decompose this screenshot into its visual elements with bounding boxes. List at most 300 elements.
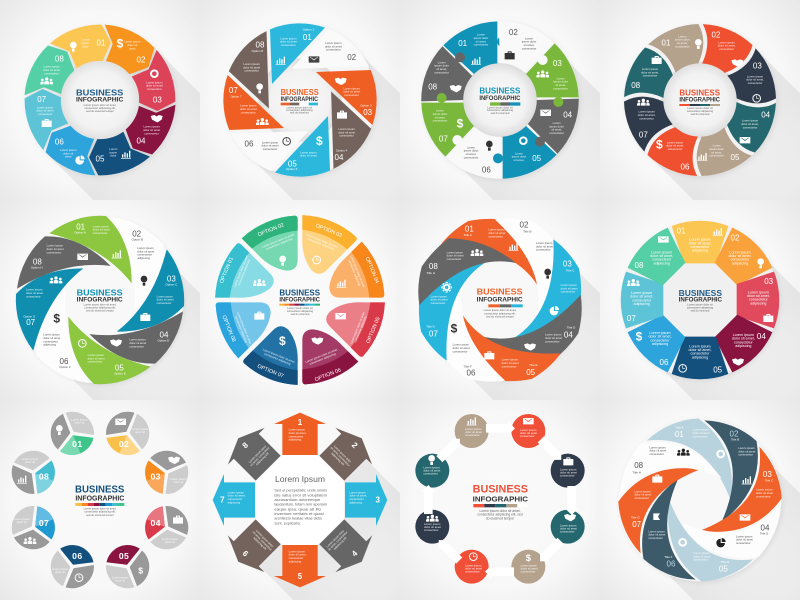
icon: clock: [752, 94, 761, 103]
icon: people: [256, 118, 269, 125]
circle 08: [0, 437, 64, 506]
icon: briefcase: [652, 56, 662, 64]
text 04: consectetur: [734, 340, 754, 344]
segment 02: Title B: [731, 437, 739, 441]
text 07: Lorem ipsum: [240, 104, 257, 108]
text 08: consectetur: [447, 257, 461, 261]
segment 02: 02: [731, 234, 740, 243]
text 01: adipiscing: [692, 249, 708, 253]
text 02: sit amet,: [524, 43, 535, 47]
node 06: [455, 550, 489, 584]
segment 01: 01: [675, 430, 684, 439]
text 07: dolor sit amet,: [638, 113, 656, 117]
text 07: consectetur: [424, 528, 439, 532]
text 07: Lorem ipsum: [634, 489, 651, 493]
petal option 02: OPTION 02: [257, 222, 285, 238]
text 02: consectetur: [719, 47, 734, 51]
icon: dollar: $: [636, 329, 643, 343]
circle 07: [0, 494, 64, 563]
text 08: consectetur: [423, 471, 438, 475]
text 06: Lorem ipsum: [43, 333, 60, 337]
text 03: Lorem ipsum: [747, 74, 763, 78]
text 07: Lorem ipsum: [37, 105, 53, 109]
icon: dollar: $: [279, 334, 286, 348]
title: BUSINESS: [279, 287, 320, 297]
text 06: Lorem ipsum: [648, 529, 665, 533]
segment 04: 04: [160, 330, 169, 339]
text 1: consectetur: [289, 434, 303, 438]
petal option 01: OPTION 01: [219, 256, 235, 284]
text 01: dolor: [82, 44, 89, 48]
circle 02: [94, 398, 163, 464]
segment 01: Title A: [675, 426, 683, 430]
segment 07: [16, 268, 83, 351]
segment 05: [89, 132, 150, 175]
segment 02: Title B: [523, 229, 532, 233]
text 04: ipsum dolor: [549, 124, 564, 128]
segment 05: Title E: [529, 363, 538, 367]
title: consectetur adipiscing: [687, 109, 714, 113]
title: INFOGRAPHIC: [679, 298, 723, 304]
segment 03: Title C: [765, 478, 774, 482]
icon: bulb: [70, 42, 77, 52]
text 07: dolor sit: [17, 520, 27, 524]
segment 07: [618, 468, 700, 553]
text 03: dolor sit amet: [756, 491, 773, 495]
title: BUSINESS: [679, 288, 722, 298]
segment 07: Title G: [631, 516, 640, 520]
text 06: dolor sit amet: [648, 533, 666, 537]
segment 06: Title F: [664, 555, 673, 559]
text 02: Lorem ipsum: [738, 446, 755, 450]
circle 06: [37, 536, 106, 600]
title: BUSINESS: [75, 485, 125, 496]
text 3: Lorem ipsum: [349, 490, 366, 494]
text 07: Lorem ipsum: [13, 517, 30, 521]
segment 02: [662, 405, 780, 523]
text 01: consectetur adipiscing: [237, 258, 251, 286]
segment 01: [443, 21, 507, 74]
text 01: consectetur: [465, 433, 480, 437]
segment 02: [683, 10, 756, 83]
icon: briefcase: [173, 516, 183, 524]
text 08: consectetur: [434, 70, 449, 74]
segment 05: 05: [288, 160, 297, 169]
icon: briefcase: [337, 111, 347, 119]
text 01: dolor sit amet,: [689, 241, 711, 245]
segment 05: 05: [96, 154, 105, 163]
arrow 3: 3: [375, 495, 380, 504]
icon: briefcase: [652, 475, 662, 483]
segment 04: Option 4: [336, 149, 348, 153]
text 04: Lorem ipsum dolor sit amet: [349, 255, 366, 288]
segment 01: 01: [662, 39, 671, 48]
text 04: sit amet,: [551, 128, 562, 132]
text 05: sit amet,: [711, 150, 722, 154]
text 2: adipiscing elit: [330, 451, 345, 466]
text 02: Lorem ipsum: [520, 428, 536, 432]
text 07: dolor sit amet: [240, 107, 257, 111]
text 05: Lorem: [109, 147, 117, 151]
text 06: dolor sit amet: [262, 144, 279, 148]
segment 06: Option F: [59, 365, 71, 369]
segment 04: [677, 462, 795, 580]
segment 07: [421, 103, 474, 157]
segment 03: [526, 43, 579, 97]
node 07: [415, 510, 449, 544]
text 04: dolor sit amet: [143, 128, 160, 132]
segment 02: [478, 4, 554, 80]
segment 06: 06: [467, 369, 476, 378]
arrow 2: 2: [350, 441, 360, 450]
text 05: consectetur adipiscing: [353, 315, 368, 343]
segment 07: 07: [632, 520, 642, 529]
heading: Lorem Ipsum: Lorem Ipsum: [275, 474, 325, 484]
text block: centre paragraph: eaque ipsa, quae ab illo: [274, 507, 321, 511]
text 02: dolor sit amet: [325, 44, 342, 48]
text 03: Lorem: [557, 76, 565, 80]
text block: centre paragraph: architecto beatae vitae dicta: [274, 517, 323, 521]
icon: pie: [550, 306, 559, 315]
title: [679, 288, 723, 312]
segment 08: Option H: [31, 266, 43, 270]
circle 05: [94, 536, 163, 600]
text block: centre paragraph: laudantium, totam rem aperiam: [274, 503, 327, 507]
text 02: consectetur: [536, 248, 551, 252]
segment 07: 07: [439, 135, 448, 144]
text 6: sit amet, consectetur: [252, 530, 273, 552]
segment 03: 03: [363, 108, 373, 117]
title: BUSINESS: [77, 288, 123, 298]
icon: handshake: [564, 514, 576, 521]
segment 02: [76, 205, 182, 311]
title: [77, 288, 123, 313]
title: sed do eiusmod: [691, 112, 710, 116]
text 05: Lorem: [515, 151, 523, 155]
text 06: Lorem ipsum: [60, 148, 77, 152]
text block: centre paragraph: accusantium doloremque: [274, 498, 320, 502]
title: Lorem ipsum dolor sit: [287, 105, 312, 109]
text 07: dolor sit amet: [37, 109, 54, 113]
text 04: consectetur: [736, 541, 751, 545]
text 01: ipsum dolor: [474, 36, 488, 40]
text 04: Lorem ipsum: [129, 338, 146, 342]
text 6: adipiscing elit: [253, 536, 268, 551]
text 01: consectetur: [488, 234, 503, 238]
text 05: Lorem ipsum: [693, 551, 710, 555]
segment 06: 06: [245, 140, 254, 149]
icon: dollar: $: [656, 137, 663, 151]
segment 02: 02: [347, 53, 357, 62]
segment 01: [50, 25, 111, 68]
icon: people: [24, 537, 36, 544]
segment 02: [87, 11, 161, 85]
text 08: dolor sit amet,: [650, 254, 673, 258]
panel 12: spiral swirl infographic: [618, 418, 800, 600]
text 06: dolor sit amet: [43, 336, 61, 340]
text 06: consectetur: [668, 147, 682, 151]
segment 07: 07: [627, 314, 636, 323]
icon: chart: [17, 476, 27, 484]
title: BUSINESS: [477, 286, 523, 296]
title: sed do eiusmod tempor: [486, 314, 514, 318]
segment 05: 05: [115, 363, 124, 372]
circle 03: [136, 437, 202, 506]
title: INFOGRAPHIC: [77, 298, 123, 304]
icon: mail: [309, 56, 319, 63]
segment 05: [463, 315, 561, 381]
icon: mail: [77, 254, 88, 260]
text 04: dolor sit amet: [560, 527, 577, 531]
node 04: [551, 510, 585, 544]
text 04: consectetur: [339, 134, 354, 138]
text 04: adipiscing: [735, 344, 751, 348]
segment 04: 04: [564, 330, 573, 339]
title: consectetur adipiscing elit,: [84, 306, 116, 310]
text 01: dolor sit amet: [93, 228, 110, 232]
title: BUSINESS: [479, 86, 521, 96]
icon: chart: [742, 476, 752, 484]
icon: briefcase: [763, 314, 773, 322]
title: consectetur adipiscing: [286, 108, 313, 112]
icon: bulb: [544, 269, 551, 279]
text 4: sit amet, consectetur: [327, 530, 348, 552]
text 02: dolor sit amet: [520, 431, 537, 435]
text 04: consectetur: [743, 125, 757, 129]
text 04: consectetur: [549, 131, 564, 135]
segment 02: [706, 224, 776, 294]
text 05: dolor sit amet,: [689, 348, 711, 352]
text 06: Lorem ipsum: [52, 567, 68, 571]
text 02: Lorem ipsum: [536, 241, 552, 245]
title: sed do eiusmod: [491, 111, 510, 115]
icon: mail: [523, 418, 534, 424]
text 02: Lorem ipsum dolor sit amet: [261, 232, 295, 249]
icon: chart: [112, 250, 122, 258]
text 5: adipiscing: [289, 559, 302, 563]
icon: chart: [336, 280, 346, 288]
icon: people: [677, 449, 690, 456]
text 02: consectetur: [738, 453, 753, 457]
arrow 5: [274, 545, 326, 587]
segment 07: 07: [26, 318, 36, 327]
icon: chart: [121, 151, 131, 159]
petal option 06: OPTION 06: [314, 367, 342, 383]
icon: chart: [471, 57, 481, 65]
text 5: consectetur: [289, 556, 303, 560]
icon: mail: [540, 110, 551, 116]
text 03: Lorem ipsum: [560, 468, 576, 472]
segment 03: 03: [763, 470, 772, 479]
icon: clock: [678, 364, 687, 373]
segment 04: 04: [761, 523, 770, 532]
title: INFOGRAPHIC: [281, 97, 319, 103]
text 03: Lorem ipsum dolor sit amet: [305, 232, 339, 249]
text 08: Lorem ipsum: [649, 445, 666, 449]
text 03: Lorem ipsum: [561, 283, 577, 287]
icon: people: [627, 279, 640, 286]
text 01: Lorem ipsum: [71, 418, 88, 422]
icon: handshake: [110, 339, 122, 347]
text 01: sit amet,: [677, 41, 688, 45]
text 03: dolor sit amet,: [746, 78, 764, 82]
icon: people: [426, 515, 439, 522]
text 05: Lorem ipsum: [502, 358, 518, 362]
text 01: Lorem ipsum: [465, 427, 481, 431]
icon: bulb: [256, 83, 263, 93]
text 1: Lorem ipsum: [289, 428, 305, 432]
arrow 5: 5: [298, 572, 303, 581]
icon: people: [536, 70, 549, 77]
circle 03: 03: [151, 471, 161, 481]
text 8: sit amet, consectetur: [249, 446, 270, 467]
icon: dollar: $: [117, 37, 124, 51]
text 04: Lorem ipsum: [162, 537, 178, 541]
segment 07: Option 7: [230, 94, 242, 98]
segment 06: 06: [60, 357, 69, 366]
title: sed do eiusmod tempor: [86, 513, 114, 517]
title: sed do eiusmod: [691, 308, 710, 312]
text 01: ipsum dolor: [675, 38, 690, 42]
segment 03: 03: [753, 62, 762, 71]
text 05: ipsum dolor: [709, 147, 724, 151]
text 08: dolor sit amet: [43, 68, 60, 72]
icon: mail: [658, 236, 669, 243]
circle 08: 08: [39, 471, 49, 481]
text 04: dolor sit amet: [736, 538, 753, 542]
text 01: consectetur: [474, 43, 488, 47]
text 05: consectetur: [709, 154, 724, 158]
segment 06: [416, 284, 532, 400]
segment 06: [18, 289, 124, 395]
text 08: Lorem ipsum: [651, 250, 672, 254]
text 3: dolor sit amet,: [349, 494, 367, 498]
segment 04: [484, 268, 600, 384]
title: consectetur adipiscing elit,: [84, 106, 116, 110]
segment 08: 08: [428, 83, 438, 92]
segment 01: [270, 23, 325, 84]
segment 08: 08: [631, 81, 641, 90]
segment 03: Option 3: [360, 104, 372, 108]
title: Lorem ipsum dolor sit amet,: [484, 308, 517, 312]
icon: ring: [150, 69, 159, 78]
text 6: Lorem ipsum dolor: [255, 529, 274, 548]
segment 05: [672, 337, 728, 379]
icon: dollar: $: [53, 312, 60, 326]
text 05: ipsum dolor: [512, 155, 526, 159]
cycle arrows: [422, 422, 578, 578]
text 01: ipsum: [82, 41, 90, 45]
petal option 05: [322, 279, 401, 358]
title: consectetur adipiscing: [687, 305, 714, 309]
segment 01: 01: [458, 39, 468, 48]
text 07: Lorem ipsum dolor sit amet: [262, 347, 295, 364]
text block: centre paragraph: inventore veritatis et quasi: [274, 512, 324, 516]
text 06: consectetur adipiscing: [309, 352, 337, 366]
icon: mail: [740, 137, 750, 143]
segment 07: 07: [37, 95, 47, 104]
segment 06: [624, 306, 694, 376]
segment 07: [621, 272, 663, 328]
title: consectetur adipiscing: [487, 108, 514, 112]
segment 06: Title F: [464, 364, 472, 368]
segment 01: Option 1: [303, 27, 314, 31]
text 03: dolor sit amet: [157, 298, 174, 302]
icon: bulb: [428, 455, 435, 465]
icon: bulb: [279, 256, 286, 266]
segment 06: [446, 120, 522, 196]
title: [679, 87, 721, 116]
text 04: Lorem ipsum: [560, 524, 576, 528]
segment 07: 07: [639, 130, 648, 139]
text 06: dolor sit: [63, 151, 73, 155]
title: INFOGRAPHIC: [279, 298, 321, 304]
text 07: Lorem: [436, 109, 444, 113]
text 01: dolor sit: [74, 421, 84, 425]
segment 03: [700, 447, 782, 532]
petal option 07: [242, 322, 321, 401]
icon: bulb: [757, 258, 764, 268]
panel 9: eight small circles infographic: [12, 412, 188, 588]
panel 11: circle cycle infographic: [415, 414, 585, 584]
text 03: Lorem ipsum: [343, 86, 360, 90]
text 03: Lorem ipsum: [756, 488, 772, 492]
text 06: consectetur: [651, 338, 670, 342]
text 06: sit amet,: [466, 152, 477, 156]
segment 01: 01: [465, 225, 474, 234]
title: BUSINESS: [679, 87, 720, 97]
text 02: amet: [129, 46, 136, 50]
text 06: consectetur: [465, 570, 480, 574]
segment 03: [515, 239, 581, 337]
circle 04: 04: [151, 518, 161, 528]
icon: handshake: [311, 337, 323, 345]
title: Lorem ipsum dolor sit amet,: [84, 103, 117, 107]
text 02: Lorem ipsum: [132, 427, 148, 431]
segment 08: [404, 46, 480, 122]
text 05: Lorem ipsum: [521, 564, 537, 568]
icon: briefcase: [505, 51, 515, 59]
segment 01: 01: [76, 222, 86, 231]
circle 04: [136, 494, 202, 563]
segment 05: Option 5: [286, 167, 298, 171]
node 05: [511, 550, 545, 584]
title: INFOGRAPHIC: [679, 98, 721, 104]
text 08: dolor sit amet: [47, 247, 64, 251]
text 02: dolor sit amet: [137, 249, 155, 253]
text 05: ipsum: [110, 150, 118, 154]
text 02: dolor sit: [127, 43, 137, 47]
segment 01: 01: [303, 33, 312, 42]
text 03: consectetur adipiscing: [307, 237, 335, 251]
segment 07: [624, 97, 673, 152]
text 5: Lorem ipsum: [289, 549, 305, 553]
text 08: Lorem ipsum: [47, 244, 63, 248]
segment 04: [717, 83, 790, 156]
text 02: dolor sit amet,: [718, 44, 736, 48]
icon: briefcase: [484, 351, 494, 359]
icon: handshake: [731, 59, 743, 67]
panel 5: swirl petals infographic: [16, 216, 200, 400]
text 08: Lorem ipsum: [447, 250, 463, 254]
text 04: Lorem ipsum: [143, 125, 160, 129]
text 05: dolor sit amet: [521, 567, 538, 571]
text 04: dolor sit amet,: [732, 337, 755, 341]
text 07: dolor sit amet: [424, 525, 441, 529]
text 03: consectetur: [748, 81, 762, 85]
text 05: Lorem ipsum: [88, 353, 104, 357]
arrow 4: 4: [350, 549, 360, 558]
